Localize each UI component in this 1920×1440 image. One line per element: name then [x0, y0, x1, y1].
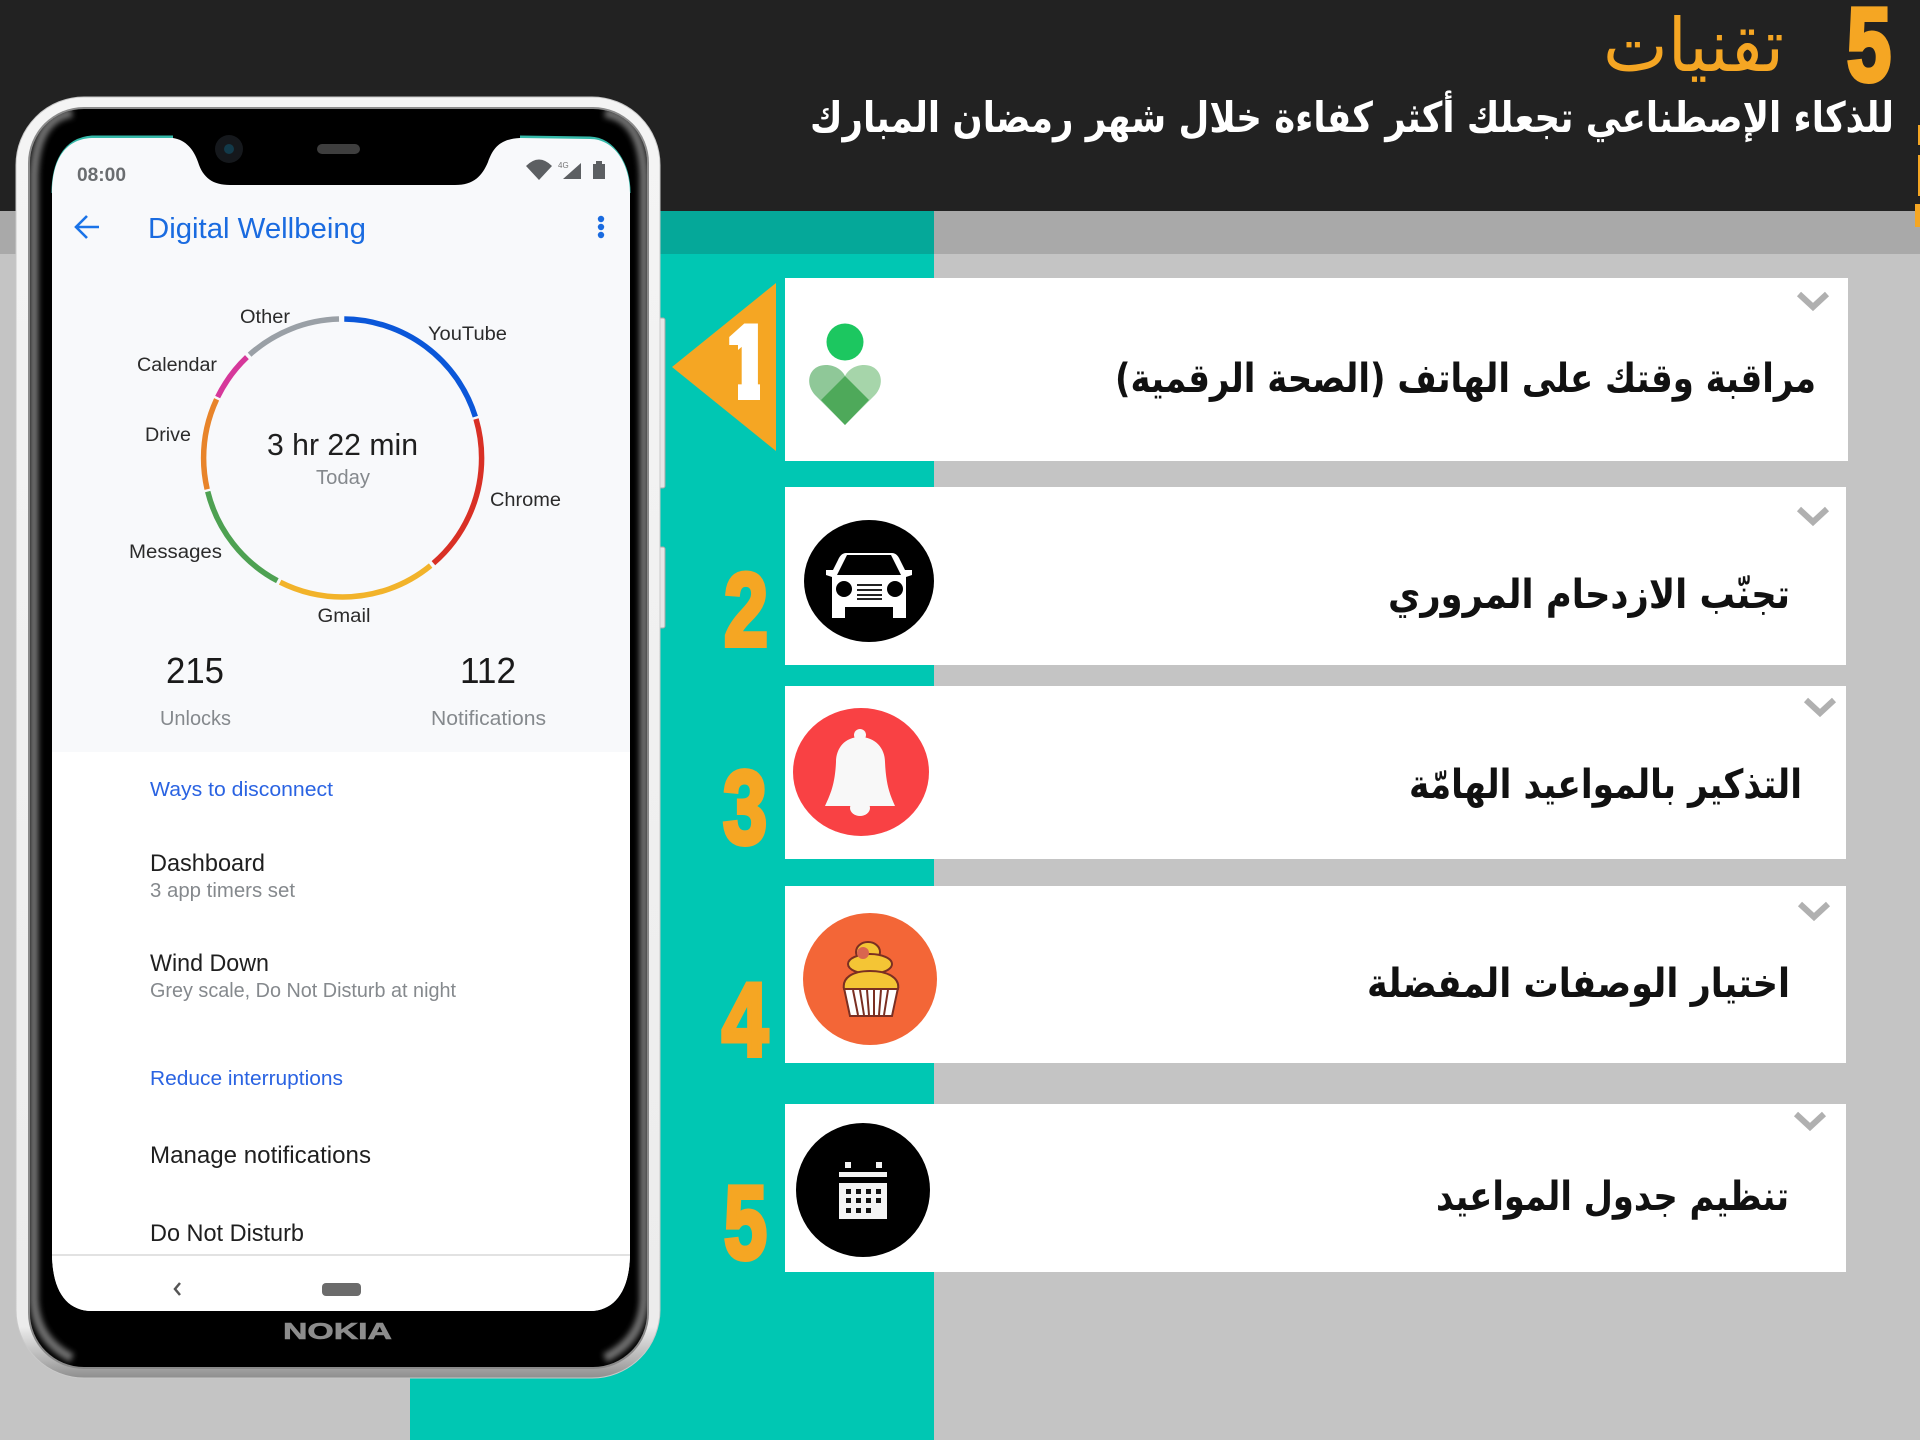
- card 3 background: [785, 686, 1846, 859]
- settings list: [150, 779, 456, 1247]
- back gesture: [175, 1283, 180, 1295]
- chevron: [1800, 904, 1828, 917]
- number 3: 3: [723, 750, 767, 866]
- donut labels: Chrome: [490, 490, 561, 511]
- brand name: NOKIA: [283, 1318, 392, 1344]
- notifications stat: 112: [460, 650, 516, 691]
- settings list: Manage notifications: [150, 1142, 371, 1169]
- donut chart: [204, 319, 482, 597]
- today label: Today: [316, 467, 370, 489]
- icon: bell: [793, 708, 929, 836]
- unlocks stat: [160, 650, 231, 730]
- settings list: Grey scale, Do Not Disturb at night: [150, 980, 456, 1002]
- card 2 background: [785, 487, 1846, 665]
- donut labels: [129, 307, 561, 627]
- card 5 background: [785, 1104, 1846, 1272]
- grey band under header: [0, 211, 1920, 254]
- card 3: [785, 686, 1846, 859]
- settings list: Ways to disconnect: [150, 779, 333, 801]
- clipped orange fragment at right edge: [1915, 125, 1920, 227]
- card 1: [785, 278, 1848, 461]
- settings list: Dashboard: [150, 850, 265, 877]
- icon: calendar: [796, 1123, 930, 1257]
- status icons: 4G: [558, 161, 569, 170]
- status icons: [526, 160, 605, 180]
- donut labels: YouTube: [428, 324, 507, 345]
- settings list: Reduce interruptions: [150, 1068, 343, 1090]
- card 1 text: مراقبة وقتك على الهاتف (الصحة الرقمية): [1115, 356, 1816, 402]
- icon: car: [804, 520, 934, 642]
- card 2 text: تجنّب الازدحام المروري: [1388, 572, 1790, 618]
- camera: [215, 135, 243, 163]
- chevron: [1799, 509, 1827, 522]
- app title: Digital Wellbeing: [148, 213, 366, 245]
- icon: digital wellbeing: [809, 324, 881, 425]
- phone bezel: [30, 109, 647, 1367]
- arrow marker with number 1: [672, 283, 776, 451]
- title block: [810, 0, 1894, 143]
- notifications stat: Notifications: [431, 708, 546, 730]
- screen fringe: [53, 137, 629, 1260]
- donut labels: Drive: [145, 425, 191, 446]
- settings list: Wind Down: [150, 950, 269, 977]
- total time: 3 hr 22 min: [267, 427, 418, 462]
- card 2: [785, 487, 1846, 665]
- unlocks stat: Unlocks: [160, 708, 231, 730]
- bezel shading: [34, 113, 644, 1358]
- icon: cupcake: [803, 913, 937, 1045]
- donut labels: Other: [240, 307, 291, 328]
- settings list: 3 app timers set: [150, 880, 295, 902]
- phone bezel edge: [28, 107, 649, 1369]
- donut labels: Messages: [129, 542, 222, 563]
- back arrow: [76, 216, 99, 238]
- phone side buttons: [658, 318, 665, 628]
- title word: تقنيات: [1603, 3, 1784, 89]
- number 2: 2: [724, 552, 768, 668]
- overflow menu: [598, 216, 604, 238]
- card 4 background: [785, 886, 1846, 1063]
- card 5: [785, 1104, 1846, 1272]
- card 3 text: التذكير بالمواعيد الهامّة: [1409, 762, 1802, 808]
- status time: 08:00: [77, 165, 126, 186]
- card 1 background: [785, 278, 1848, 461]
- settings list: Do Not Disturb: [150, 1220, 304, 1247]
- donut labels: Gmail: [318, 606, 370, 627]
- number 5: 5: [724, 1166, 767, 1282]
- card 4: [785, 886, 1846, 1063]
- dark teal band: [410, 211, 934, 254]
- teal column: [410, 254, 934, 1440]
- number 4: 4: [722, 962, 768, 1078]
- chevron: [1796, 1114, 1824, 1127]
- donut labels: Calendar: [137, 355, 218, 376]
- arrow marker with number 1: 1: [727, 306, 769, 422]
- home pill: [322, 1283, 361, 1296]
- unlocks stat: 215: [166, 650, 224, 691]
- header bar: [0, 0, 1920, 211]
- phone screen: [52, 138, 630, 1311]
- chevron: [1799, 294, 1827, 307]
- speaker: [317, 144, 360, 154]
- notifications stat: [431, 650, 546, 730]
- phone mockup: [16, 97, 665, 1378]
- chevron: [1806, 700, 1834, 713]
- phone body: [16, 97, 660, 1378]
- card 4 text: اختيار الوصفات المفضلة: [1367, 961, 1790, 1007]
- navigation divider: [52, 1254, 630, 1256]
- screen lower list background: [52, 1253, 630, 1311]
- card 5 text: تنظيم جدول المواعيد: [1436, 1174, 1789, 1220]
